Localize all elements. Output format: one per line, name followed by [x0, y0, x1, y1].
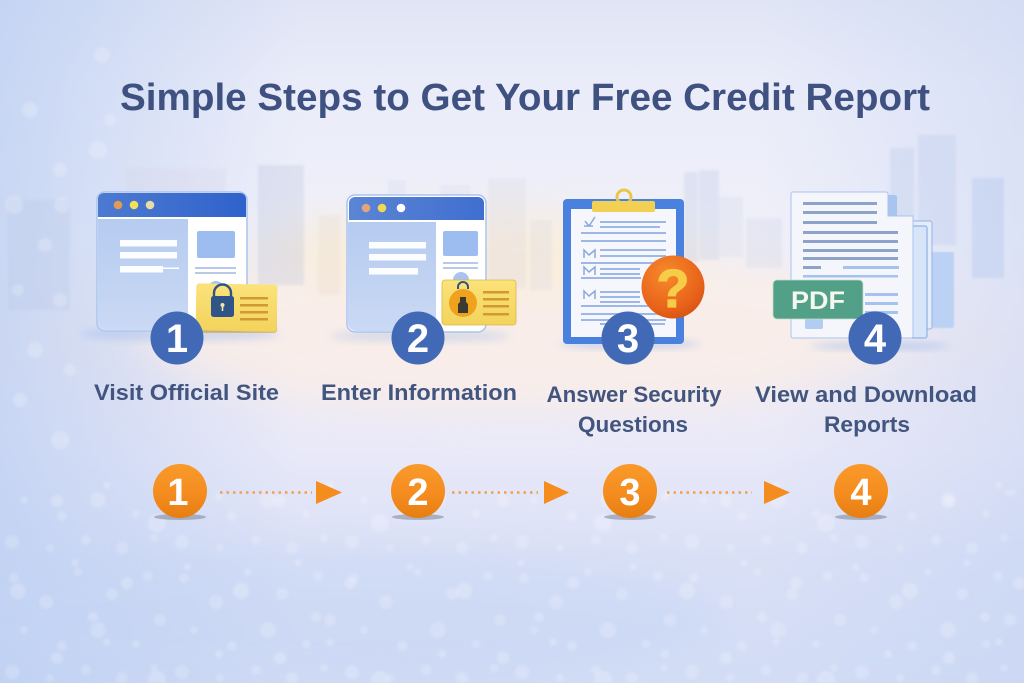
label: view and download reports: View and Download [755, 382, 977, 407]
label: answer security questions: Answer Security [546, 382, 722, 407]
number badge 1 [150, 312, 204, 364]
icon: clipboard checklist with question mark: ? [656, 259, 690, 319]
orange step 1: 1 [167, 472, 189, 514]
progress row [153, 464, 888, 520]
arrow 3 to 4 [667, 481, 790, 504]
orange step 2: 2 [407, 472, 429, 514]
icon: document stack with pdf tag: PDF [791, 287, 845, 315]
orange step 4: 4 [850, 472, 872, 514]
orange step 1 [153, 464, 207, 520]
label: view and download reports: Reports [824, 412, 910, 437]
label: answer security questions [546, 382, 722, 437]
step 4 [755, 192, 977, 437]
title: Simple Steps to Get Your Free Credit Report [120, 77, 930, 119]
label: visit official site: Visit Official Site [94, 380, 279, 405]
label: answer security questions: Questions [578, 412, 688, 437]
number badge 4 [848, 312, 902, 364]
arrow 2 to 3 [452, 481, 569, 504]
step 3 [546, 190, 722, 437]
number badge 3: 3 [617, 317, 639, 361]
orange step 2 [391, 464, 445, 520]
step 2 [321, 195, 517, 405]
number badge 3 [602, 312, 654, 364]
icon: document stack with pdf tag [773, 192, 954, 350]
number badge 2: 2 [407, 317, 429, 361]
number badge 4: 4 [864, 317, 887, 361]
arrow 1 to 2 [220, 481, 342, 504]
label: view and download reports [755, 382, 977, 437]
orange step 3 [603, 464, 657, 520]
number badge 2 [392, 312, 444, 364]
icon: browser window with lock card [80, 192, 280, 341]
city skyline [8, 135, 1004, 310]
step 1 [80, 192, 280, 405]
icon: browser window with form card [330, 195, 516, 342]
number badge 1: 1 [166, 317, 188, 361]
label: enter information: Enter Information [321, 380, 517, 405]
orange step 4 [834, 464, 888, 520]
icon: clipboard checklist with question mark [560, 190, 704, 349]
orange step 3: 3 [619, 472, 641, 514]
left bokeh [5, 47, 138, 449]
